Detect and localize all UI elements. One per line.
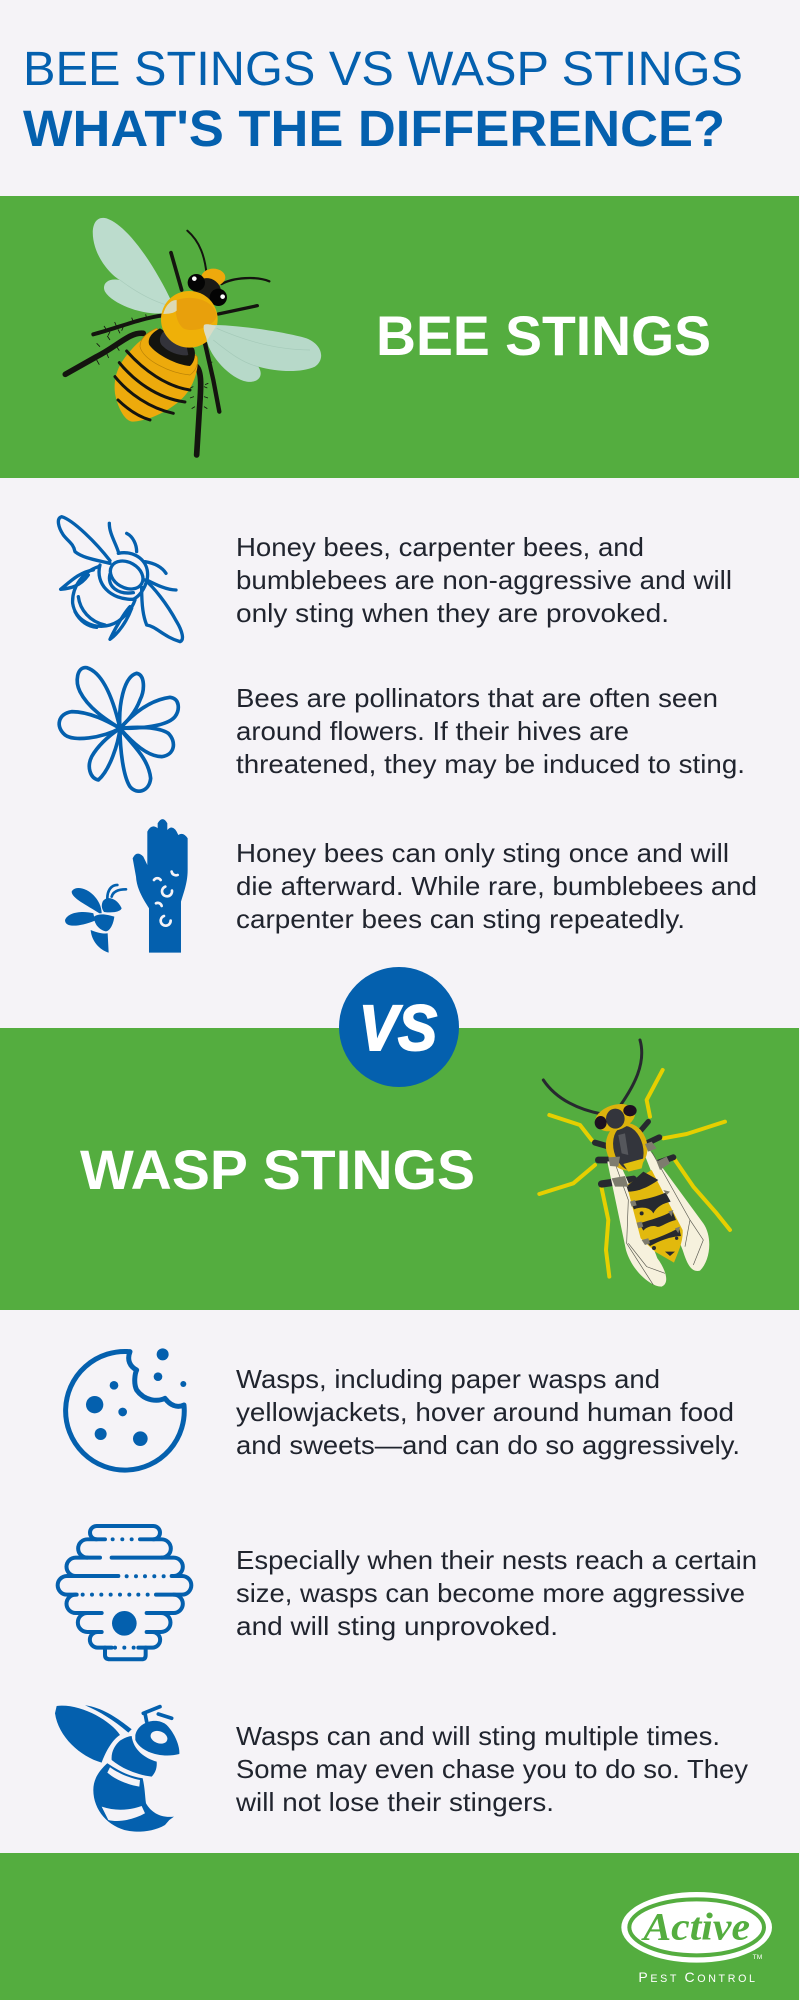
text block: wasp fact 1: Wasps, including paper wasps and (236, 1364, 660, 1394)
text block: wasp fact 2 (236, 1545, 757, 1641)
text block: wasp fact 1: and sweets—and can do so aggressively. (236, 1430, 740, 1460)
icon: bee and stung hand (65, 819, 188, 953)
text block: bee fact 2: Bees are pollinators that are often seen (236, 683, 718, 713)
badge: VS: VS (359, 992, 437, 1064)
panel: footer band (0, 1853, 799, 2000)
text block: bee fact 2: around flowers. If their hives are (236, 716, 629, 746)
wasp thorax and head (591, 1099, 652, 1174)
text block: bee fact 3: carpenter bees can sting repeatedly. (236, 904, 685, 934)
title: WHAT'S THE DIFFERENCE? (23, 100, 725, 157)
text block: bee fact 3 (236, 838, 757, 934)
text block: wasp fact 2: Especially when their nests reach a certain (236, 1545, 757, 1575)
text block: bee fact 3: die afterward. While rare, bumblebees and (236, 871, 757, 901)
logo: Active Pest Control: TM (753, 1954, 762, 1961)
text block: wasp fact 3: Wasps can and will sting multiple times. (236, 1721, 720, 1751)
text block: bee fact 1 (236, 532, 732, 628)
icon: solid wasp (55, 1705, 179, 1832)
logo: Active Pest Control: Active (640, 1904, 750, 1948)
panel: wasp stings banner (0, 1028, 799, 1310)
head (188, 269, 227, 310)
text block: bee fact 1: Honey bees, carpenter bees, and (236, 532, 644, 562)
text block: wasp fact 3 (235, 1721, 748, 1817)
icon: wasp nest (58, 1526, 191, 1659)
logo: Active Pest Control: PEST CONTROL (638, 1969, 755, 1985)
text block: wasp fact 3: will not lose their stingers. (235, 1787, 554, 1817)
title: BEE STINGS VS WASP STINGS (23, 43, 743, 96)
text block: wasp fact 3: Some may even chase you to do so. They (236, 1754, 748, 1784)
icon: flower outline (59, 668, 178, 791)
text block: bee fact 2: threatened, they may be induced to sting. (236, 749, 745, 779)
text block: bee fact 1: only sting when they are provoked. (236, 598, 669, 628)
text block: wasp fact 2: size, wasps can become more aggressive (236, 1578, 745, 1608)
icon: bee outline (58, 517, 182, 642)
text block: wasp fact 1 (236, 1364, 740, 1460)
text block: bee fact 3: Honey bees can only sting once and will (236, 838, 729, 868)
text block: wasp fact 1: yellowjackets, hover around human food (236, 1397, 734, 1427)
wasp abdomen (627, 1170, 683, 1263)
heading: bee stings: BEE STINGS (376, 304, 711, 367)
text block: bee fact 2 (236, 683, 745, 779)
illustration: wasp (539, 1040, 730, 1287)
icon: cookie (66, 1348, 186, 1470)
badge: VS (339, 967, 459, 1087)
text block: bee fact 1: bumblebees are non-aggressive and will (236, 565, 732, 595)
heading: wasp stings: WASP STINGS (80, 1138, 475, 1201)
panel: bee stings banner (0, 196, 799, 478)
text block: wasp fact 2: and will sting unprovoked. (236, 1611, 558, 1641)
illustration: bee (65, 218, 321, 455)
title (23, 43, 743, 157)
abdomen (115, 328, 198, 422)
logo: Active Pest Control (621, 1892, 772, 1985)
